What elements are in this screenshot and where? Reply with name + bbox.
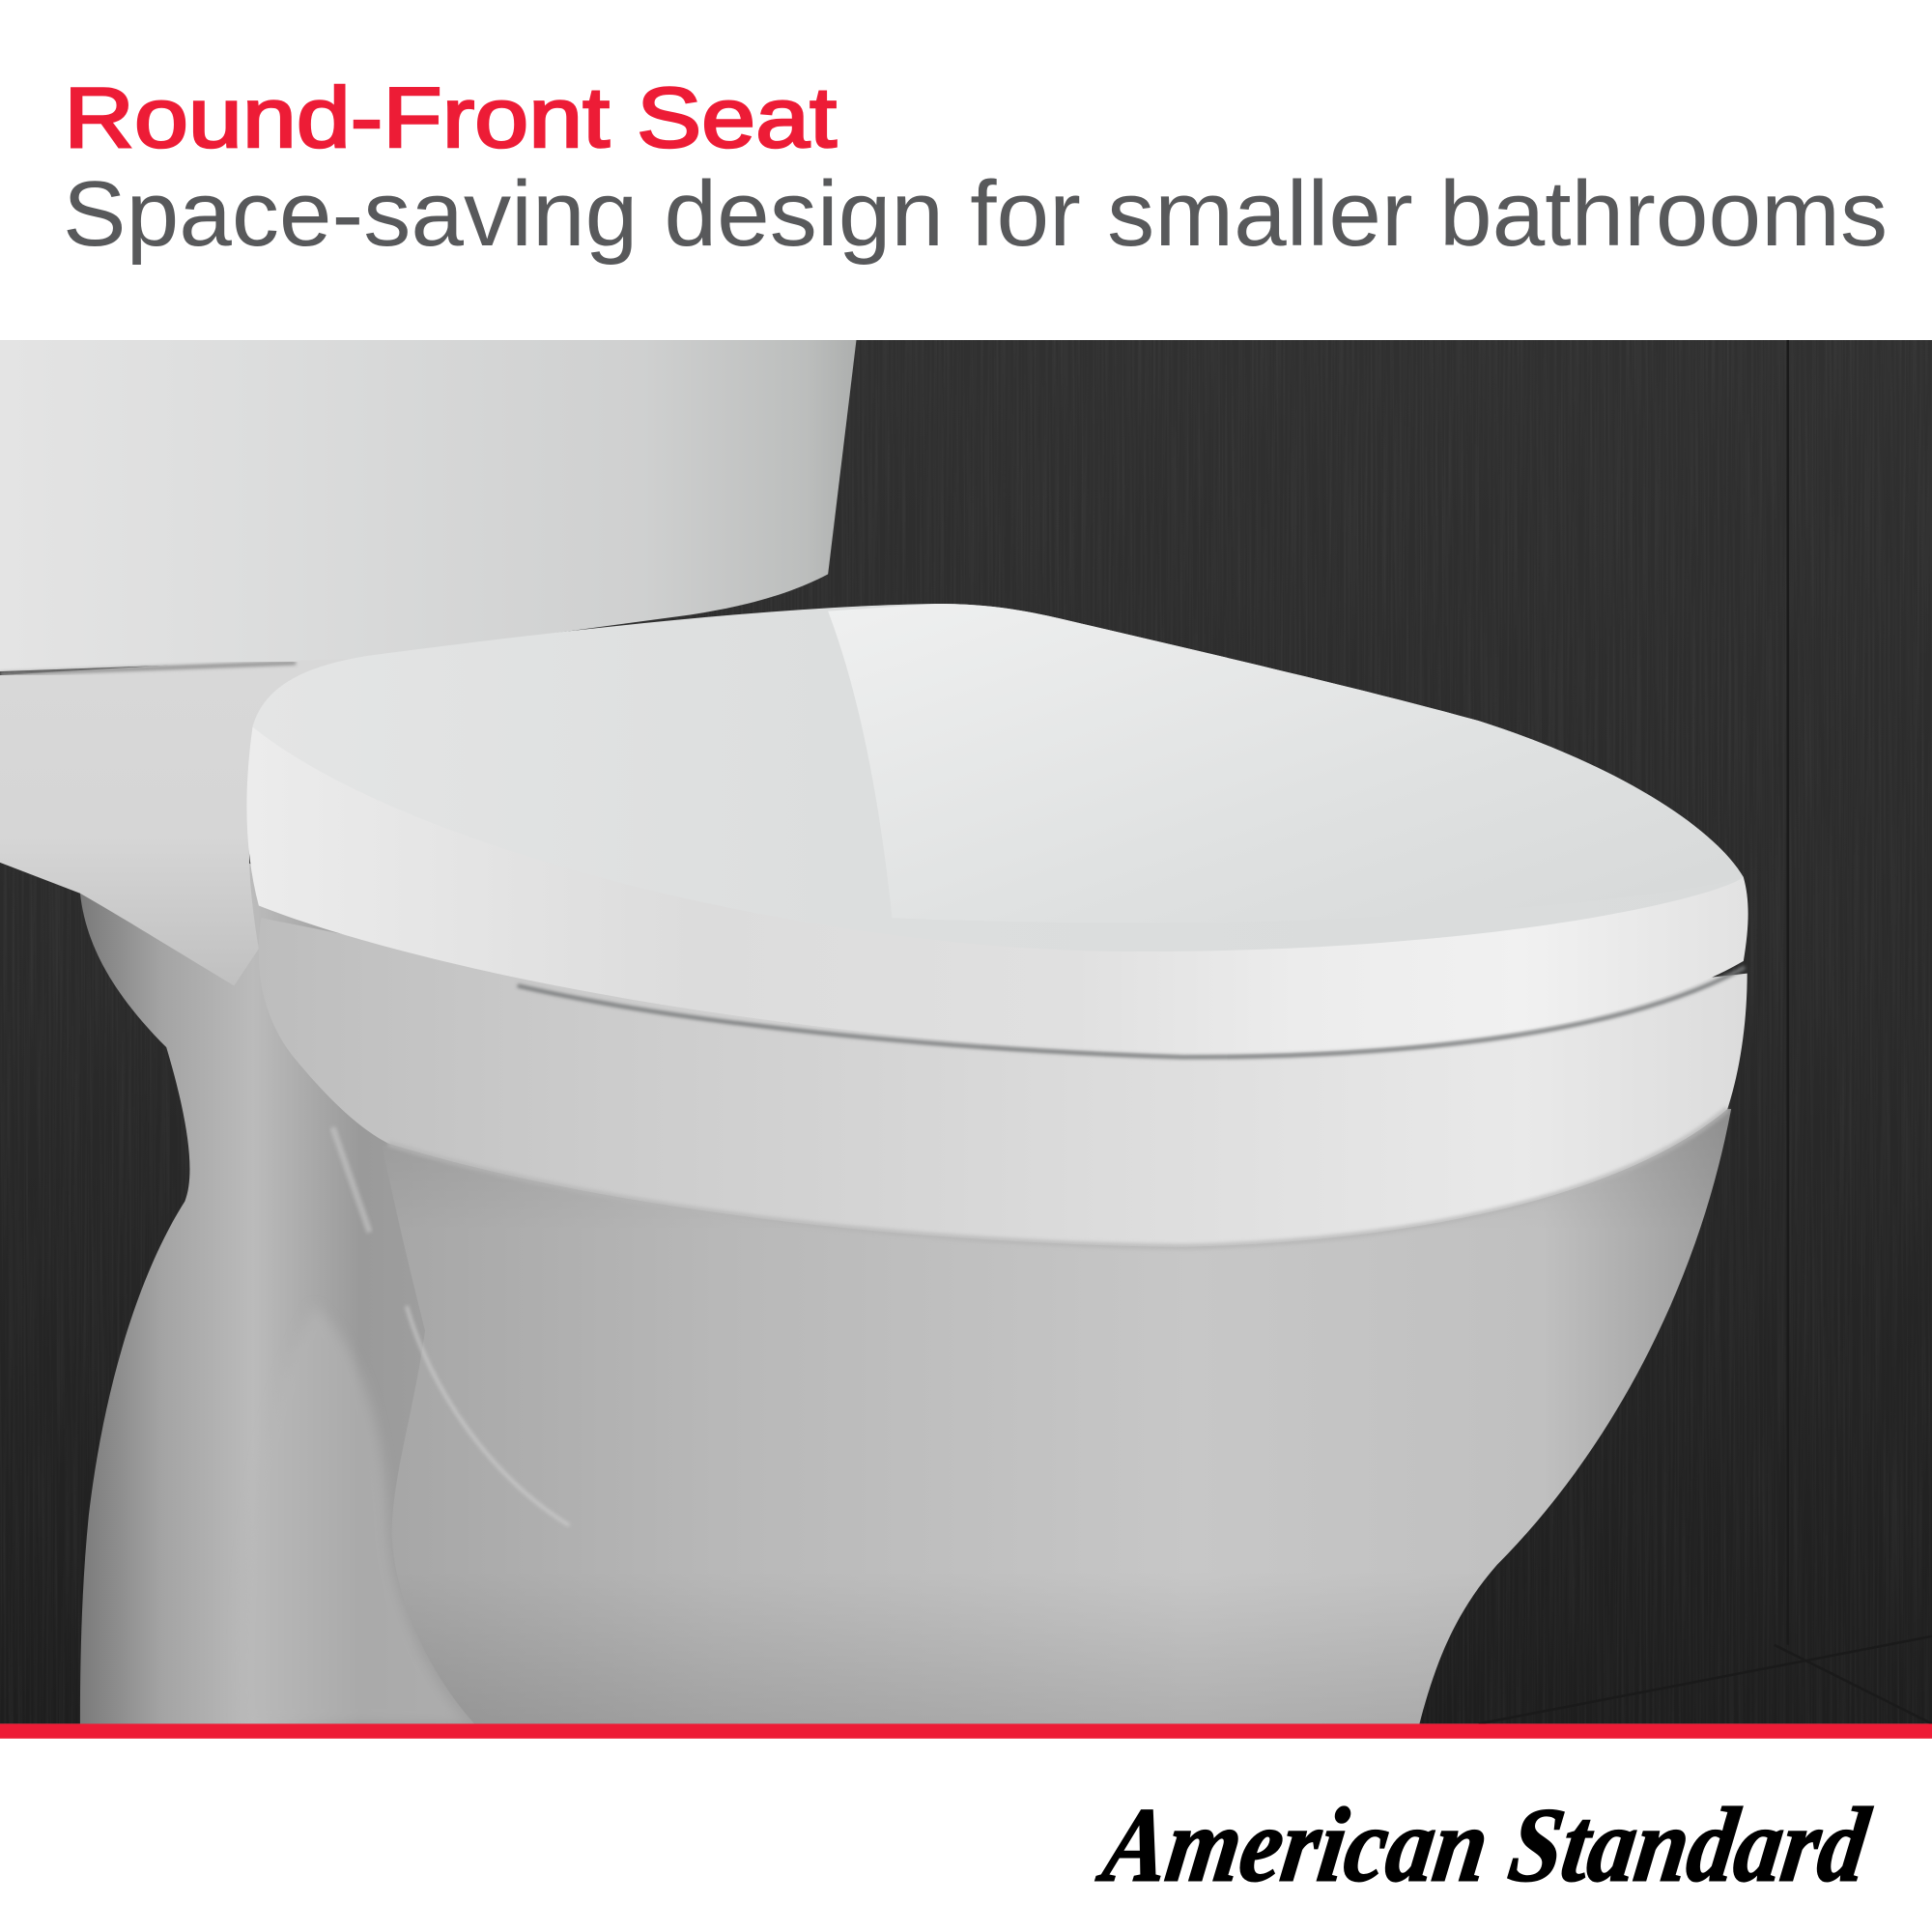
seat glossy reflection xyxy=(828,604,1744,923)
bowl side ridge xyxy=(407,1306,569,1525)
product photo panel xyxy=(0,340,1932,1723)
bowl rim band xyxy=(259,918,1747,1247)
pedestal upper ridge xyxy=(332,1127,370,1233)
heading: Round-Front Seat: Round-Front Seat xyxy=(64,70,837,165)
rim lower groove xyxy=(388,1109,1727,1247)
seat edge xyxy=(246,727,1748,1055)
tank bottom shadow xyxy=(0,663,296,674)
toilet bowl xyxy=(382,1109,1731,1723)
red divider bar xyxy=(0,1723,1932,1739)
base neck under tank xyxy=(0,653,370,985)
bowl shading xyxy=(382,1109,1731,1723)
subheading: space-saving design: Space-saving design for smaller bathrooms xyxy=(63,162,1888,266)
seat-to-rim gap shadow xyxy=(518,967,1745,1057)
toilet tank xyxy=(0,340,856,671)
toilet pedestal xyxy=(80,863,616,1723)
pedestal trapway highlight xyxy=(240,1306,469,1723)
dark wall background xyxy=(0,340,1932,1723)
seat top lid xyxy=(252,604,1744,952)
